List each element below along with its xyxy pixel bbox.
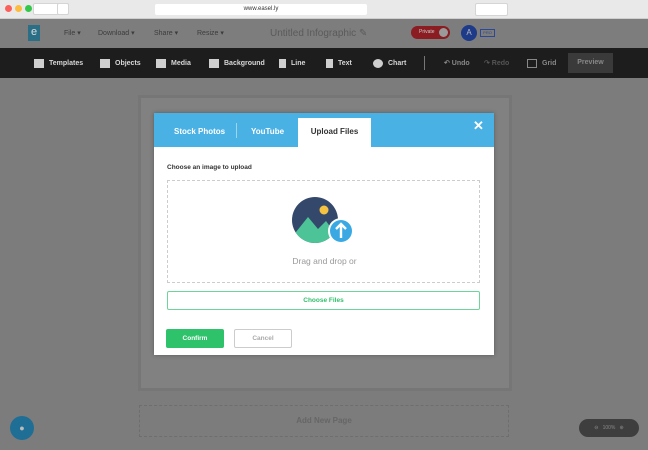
toolbar: Grid: [542, 60, 556, 67]
toolbar: Templates: [49, 60, 83, 67]
modal header tabs: Stock Photos: [174, 127, 225, 136]
menu: File ▾: [64, 30, 81, 37]
modal: [154, 113, 494, 355]
menu: Resize ▾: [197, 30, 224, 37]
zoom control: ⊖ 100% ⊕: [594, 425, 624, 431]
title: Untitled Infographic ✎: [270, 28, 367, 39]
private toggle: Private: [419, 29, 435, 35]
cancel button: Cancel: [252, 335, 274, 342]
toolbar: Background: [224, 60, 265, 67]
app header: [0, 19, 648, 48]
modal header tabs: YouTube: [251, 127, 284, 136]
toolbar: Chart: [388, 60, 406, 67]
add new page: [139, 405, 509, 437]
chat button: [10, 416, 34, 440]
close icon: ✕: [473, 118, 484, 133]
choose files button: Choose Files: [303, 297, 344, 304]
confirm button: Confirm: [183, 335, 207, 342]
add new page: Add New Page: [296, 416, 352, 425]
toolbar: [0, 48, 648, 78]
icon: image upload: [292, 197, 352, 243]
drop text: Drag and drop or: [292, 256, 357, 266]
toolbar: Text: [338, 60, 352, 67]
confirm button: [166, 329, 224, 348]
label: Choose an image to upload: [167, 164, 252, 171]
url bar: [155, 4, 367, 15]
toolbar: Objects: [115, 60, 141, 67]
avatar: A: [466, 28, 472, 37]
toolbar: Media: [171, 60, 191, 67]
traffic lights: [5, 5, 32, 12]
private toggle: [411, 26, 450, 39]
logo: e: [31, 26, 37, 38]
drop zone: [167, 180, 480, 283]
choose files button: [167, 291, 480, 310]
toolbar: ↷ Redo: [484, 60, 509, 67]
avatar: [461, 25, 477, 41]
zoom control: [579, 419, 639, 437]
menu: Download ▾: [98, 30, 135, 37]
browser bar: [0, 0, 648, 19]
menu: Share ▾: [154, 30, 178, 37]
url bar: www.easel.ly: [244, 6, 278, 12]
toolbar: ↶ Undo: [444, 60, 470, 67]
nav buttons: [33, 3, 69, 15]
toolbar: Line: [291, 60, 305, 67]
logo: [28, 25, 40, 41]
menu: [64, 30, 224, 37]
app header: PRO: [483, 30, 492, 35]
modal header tabs: Upload Files: [311, 127, 358, 136]
cancel button: [234, 329, 292, 348]
toolbar: Preview: [577, 59, 604, 66]
chat button: ●: [19, 423, 25, 433]
modal header tabs: [154, 113, 494, 147]
canvas page: [138, 95, 512, 391]
